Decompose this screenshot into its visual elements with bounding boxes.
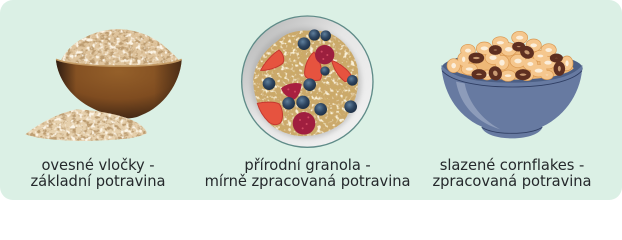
blueberries [263, 29, 358, 116]
icon: sweet cereal in blue bowl [441, 34, 583, 138]
chocolate rings [471, 44, 563, 80]
plate [241, 15, 374, 148]
bowl interior [441, 52, 583, 85]
caption: sweet cornflakes [432, 157, 592, 190]
caption: natural granola [205, 157, 410, 190]
wooden bowl [56, 59, 182, 118]
cereal base filling [450, 51, 574, 80]
caption: oat flakes [31, 157, 165, 190]
caption: natural granola: přírodní granola - [244, 157, 371, 174]
caption: natural granola: mírně zpracovaná potravina [205, 173, 410, 190]
cereal rings [449, 34, 571, 79]
strawberries [257, 50, 351, 125]
caption: sweet cornflakes: zpracovaná potravina [432, 173, 592, 190]
caption: oat flakes: ovesné vločky - [41, 157, 155, 174]
caption: oat flakes: základní potravina [31, 173, 165, 190]
bowl body [441, 65, 582, 138]
raspberries [281, 45, 334, 135]
icon: granola plate with berries [241, 15, 374, 148]
granola [250, 28, 362, 138]
bowl of oats heap [61, 29, 178, 66]
icon: oat flakes in wooden bowl [23, 27, 182, 142]
loose oat pile [23, 108, 148, 142]
caption: sweet cornflakes: slazené cornflakes - [440, 157, 584, 174]
